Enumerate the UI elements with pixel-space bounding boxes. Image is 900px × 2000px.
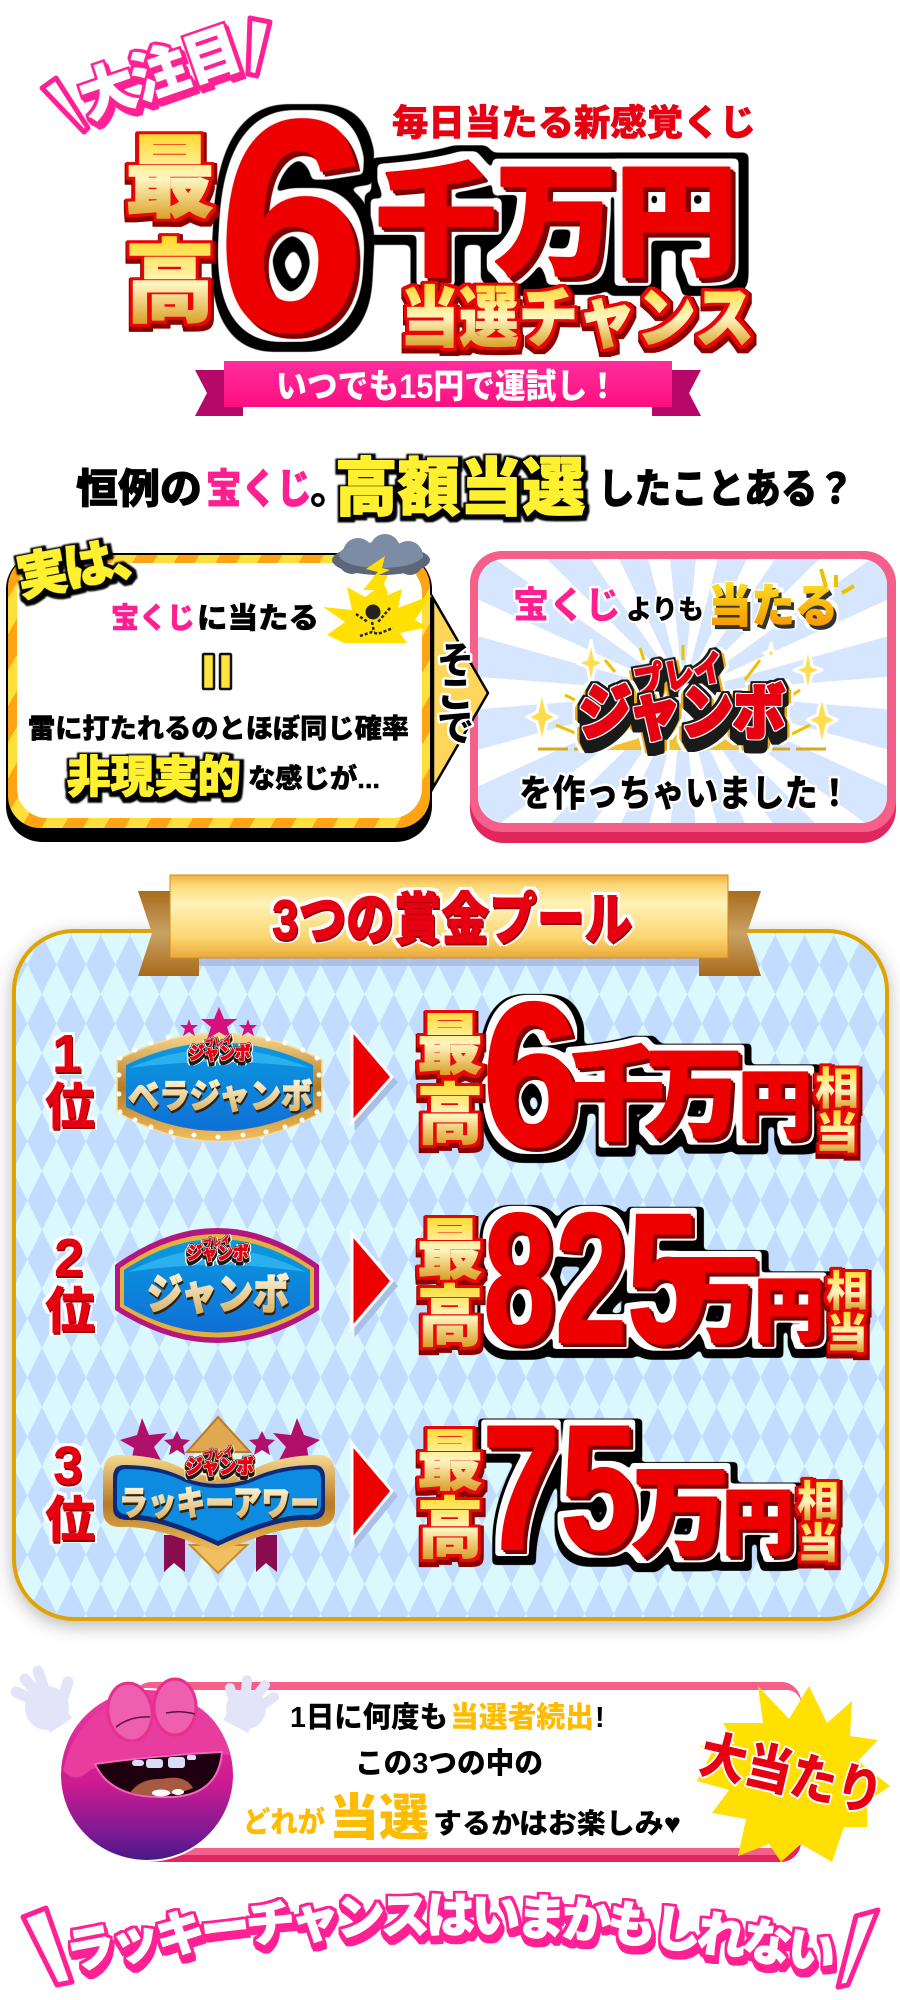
- arrow: そこで: で: [437, 708, 474, 749]
- prize: 最高75万円相当: 円: [722, 1484, 794, 1564]
- arrow: [352, 1444, 392, 1540]
- mini logo: ジャンボ: [189, 1044, 251, 1064]
- logo: プレイジャンボ: プレイ: [631, 648, 727, 703]
- panel: winners message: [132, 1682, 801, 1862]
- text: を作っちゃいました: を作っちゃいました！: [519, 773, 851, 814]
- rank: 1位: [45, 1024, 95, 1135]
- tagline: 毎日当たる新感覚くじ: 毎日当たる新感覚くじ: [392, 102, 756, 143]
- prize: 最高6千万円相当: 円: [738, 1064, 812, 1147]
- text: な感じが: な感じが...: [248, 763, 380, 794]
- heading: 恒例の宝くじ。高額当選したことある？: 高額当選: [335, 454, 585, 524]
- text: どれが当選するかはお楽しみ: するかはお楽しみ♥: [433, 1808, 681, 1839]
- callout: 大注目: 大注目: [71, 17, 248, 130]
- text: 雷に打たれるのとほぼ同じ確率: 雷に打たれるのとほぼ同じ確率: [28, 714, 409, 744]
- prize: 最高75万円相当: 相: [797, 1478, 839, 1525]
- mini logo: プレイ: [205, 1034, 233, 1051]
- main headline: 最高: 高: [125, 234, 215, 334]
- closing slogan: ラッキーチャンスはいまかもしれない: ラッキーチャンスはいまかもしれない: [68, 1890, 837, 1979]
- text: 宝くじに当たる: 宝くじ: [111, 602, 195, 635]
- icon: right glove: [223, 1680, 274, 1733]
- rank: 2位: 位: [45, 1283, 95, 1339]
- arrow: [352, 1234, 392, 1328]
- logo: プレイジャンボ: [527, 640, 837, 750]
- mini logo: ジャンボ: [186, 1457, 254, 1479]
- prize: 最高6千万円相当: 高: [417, 1078, 483, 1152]
- badge: ベラジャンボ: ベラジャンボ: [128, 1078, 312, 1116]
- prize: 最高75万円相当: 当: [797, 1520, 839, 1567]
- prize: 最高6千万円相当: [417, 960, 859, 1189]
- prize: 最高75万円相当: 最: [417, 1424, 483, 1498]
- burst: 大当たり: [694, 1686, 890, 1862]
- prize: 最高6千万円相当: 千: [563, 1039, 665, 1153]
- mini logo: ジャンボ: [187, 1244, 249, 1264]
- main headline: 6: 6: [208, 55, 376, 396]
- mini logo: プレイ: [203, 1234, 231, 1251]
- prize: 最高75万円相当: 高: [417, 1492, 483, 1566]
- callout: 実は: 実は、: [12, 525, 162, 607]
- panel: プレイジャンボ: [470, 551, 896, 843]
- prize: 最高825万円相当: 円: [754, 1272, 824, 1350]
- text: 1日に何度も当選者続出: [290, 1701, 605, 1734]
- badge: ラッキーアワー: ラッキーアワー: [119, 1485, 319, 1523]
- mini logo: プレイ: [203, 1445, 235, 1464]
- prize: 最高825万円相当: 当: [826, 1310, 868, 1357]
- subheadline: 当選チャンス: 当選チャンス: [400, 281, 754, 355]
- badge: ベラジャンボ: [116, 1007, 322, 1142]
- panel: lightning comparison: [6, 525, 432, 842]
- arrow: そこで: こ: [437, 674, 474, 715]
- rank: 2位: 2: [54, 1228, 84, 1288]
- prize: 最高6千万円相当: 当: [815, 1109, 859, 1158]
- badge: ラッキーアワー: [103, 1417, 335, 1573]
- rank: 3位: [45, 1436, 95, 1548]
- rank: 3位: 位: [45, 1492, 95, 1548]
- prize: 最高825万円相当: 825: [483, 1176, 699, 1382]
- prize: 最高75万円相当: 75: [482, 1388, 638, 1587]
- main headline: 最高: [125, 129, 215, 334]
- text: 宝くじよりも当たる: [513, 569, 854, 632]
- arrow: [352, 1030, 392, 1122]
- badge: ジャンボ: ジャンボ: [147, 1271, 289, 1318]
- text: 1日に何度も当選者続出: 当選者続出: [450, 1701, 594, 1734]
- logo: プレイジャンボ: ジャンボ: [579, 680, 785, 747]
- icon: lightning and skull burst: [323, 556, 432, 643]
- heading: 恒例の宝くじ。高額当選したことある？: 。: [310, 466, 351, 512]
- heading: 恒例の宝くじ。高額当選したことある？: [76, 454, 854, 524]
- heading: 恒例の宝くじ。高額当選したことある？: 宝くじ: [206, 466, 312, 512]
- prize: 最高75万円相当: [417, 1388, 839, 1587]
- rank: 2位: [45, 1228, 95, 1339]
- prize: 最高825万円相当: 万: [664, 1248, 760, 1355]
- rank: 3位: 3: [53, 1436, 83, 1496]
- panel: prize pools: [14, 875, 887, 1619]
- icon: storm cloud: [332, 534, 430, 578]
- text: どれが当選するかはお楽しみ: どれが: [243, 1805, 325, 1839]
- rank: 1位: 1: [52, 1024, 82, 1084]
- banner: 3つの賞金プール: 3つの賞金プール: [272, 888, 632, 951]
- text: 宝くじに当たる: に当たる: [197, 602, 319, 635]
- rank: 1位: 位: [45, 1079, 95, 1135]
- main headline: 千万円: 千万円: [375, 155, 737, 291]
- text: 宝くじよりも当たる: 宝くじ: [513, 585, 621, 626]
- arrow: そこで: [433, 598, 488, 788]
- prize: 最高825万円相当: [417, 1176, 868, 1382]
- prize: 最高6千万円相当: 6: [482, 960, 580, 1189]
- heading: 恒例の宝くじ。高額当選したことある？: したことある？: [598, 466, 854, 512]
- heading: 恒例の宝くじ。高額当選したことある？: 恒例の: [76, 466, 202, 512]
- main headline: 最高: 最: [125, 129, 215, 229]
- banner: 3つの賞金プール: [138, 875, 761, 976]
- text: 1日に何度も当選者続出: 1日に何度も: [290, 1701, 448, 1734]
- mini logo: [187, 1234, 249, 1264]
- ribbon: いつでも15円で運試し: [195, 361, 701, 416]
- text: 宝くじよりも当たる: 当たる: [708, 580, 838, 632]
- prize: 最高825万円相当: 最: [417, 1213, 483, 1287]
- badge: ジャンボ: [115, 1228, 319, 1343]
- text: 宝くじに当たる: [111, 602, 319, 635]
- prize: 最高75万円相当: 万: [632, 1459, 729, 1568]
- mouth: [95, 1752, 222, 1797]
- character: pink ball mascot: [16, 1671, 274, 1861]
- arrow: そこで: そ: [437, 640, 474, 681]
- text: この3つの中の: この3つの中の: [355, 1747, 543, 1780]
- icon: equals bars: [203, 654, 231, 689]
- prize: 最高6千万円相当: 最: [417, 1008, 483, 1082]
- text: 非現実的: 非現実的: [67, 753, 241, 802]
- sunburst background: [478, 559, 887, 823]
- text: どれが当選するかはお楽しみ: 当選: [329, 1790, 429, 1846]
- ribbon: いつでも15円で運試し: いつでも15円で運試し！: [276, 368, 618, 406]
- text: 1日に何度も当選者続出: !: [595, 1702, 605, 1734]
- prize: 最高6千万円相当: 相: [815, 1065, 859, 1114]
- prize: 最高6千万円相当: 万: [645, 1040, 743, 1150]
- prize: 最高825万円相当: 高: [417, 1280, 483, 1354]
- text: どれが当選するかはお楽しみ: [243, 1790, 681, 1846]
- prize: 最高825万円相当: 相: [826, 1268, 868, 1315]
- mini logo: [189, 1034, 251, 1064]
- icon: left glove: [16, 1671, 72, 1733]
- mini logo: [186, 1445, 254, 1479]
- text: 宝くじよりも当たる: よりも: [626, 595, 704, 625]
